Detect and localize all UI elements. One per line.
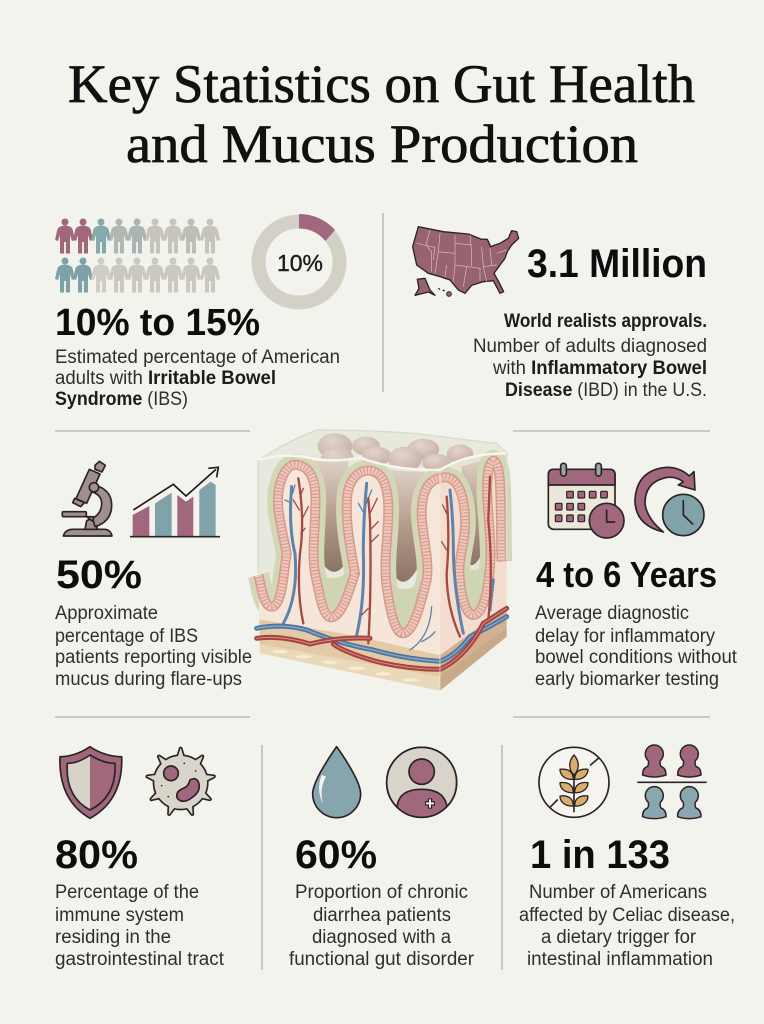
lumens — [314, 461, 350, 572]
panel: diagnostic delay — [535, 463, 738, 690]
panel: visible mucus — [55, 461, 252, 690]
description — [55, 882, 225, 970]
description — [55, 347, 340, 410]
villus interior — [258, 465, 440, 691]
description: Proportion of chronic — [295, 882, 468, 903]
statistic: 1 in 133: 1 in 133 — [530, 833, 670, 877]
description: functional gut disorder — [289, 949, 475, 970]
description: Syndrome (IBS) — [55, 389, 188, 410]
statistic: 50%: 50% — [56, 553, 142, 597]
description — [519, 882, 735, 970]
description: immune system — [55, 905, 184, 926]
panel: chronic diarrhea — [289, 747, 475, 970]
description: residing in the — [55, 927, 171, 948]
description: with Inflammatory Bowel — [492, 358, 707, 379]
green mucus layer — [258, 461, 502, 633]
icon: calendar with clock — [548, 463, 624, 538]
icon: no wheat — [539, 747, 609, 817]
description: a dietary trigger for — [541, 927, 697, 948]
donut chart: 10%: 10% — [277, 250, 323, 276]
description — [535, 603, 738, 690]
description: diarrhea patients — [313, 905, 451, 926]
front surface highlight — [258, 453, 506, 470]
description: adults with Irritable Bowel — [55, 368, 276, 389]
submucosa layers — [259, 619, 440, 691]
panel: IBS prevalence — [55, 214, 340, 410]
description — [55, 603, 252, 690]
description: percentage of IBS — [55, 626, 198, 647]
icon: people grid — [55, 218, 220, 292]
panel: celiac disease — [519, 745, 735, 970]
description: Number of Americans — [529, 882, 707, 903]
icon: people ratio — [637, 745, 707, 819]
description: Disease (IBD) in the U.S. — [505, 380, 707, 401]
description: diagnosed with a — [312, 927, 451, 948]
title: and Mucus Production — [126, 114, 638, 174]
description: bowel conditions without — [535, 647, 738, 668]
icon: immune cell — [147, 749, 214, 815]
description: delay for inflammatory — [535, 626, 715, 647]
icon: water drop — [313, 747, 361, 818]
description: Average diagnostic — [535, 603, 689, 624]
description: affected by Celiac disease, — [519, 905, 735, 926]
panel: immune system — [55, 747, 225, 970]
description: World realists approvals. — [504, 311, 707, 332]
statistic: 80%: 80% — [55, 833, 138, 877]
statistic: 4 to 6 Years: 4 to 6 Years — [536, 554, 717, 595]
statistic: 60%: 60% — [295, 833, 377, 877]
statistic: 10% to 15%: 10% to 15% — [55, 302, 260, 344]
donut chart: 10% — [258, 214, 340, 302]
front and right faces — [258, 456, 440, 691]
panel: IBD adults — [413, 227, 707, 401]
icon: circular arrow with clock — [635, 467, 704, 536]
icon: shield — [60, 747, 122, 818]
description: intestinal inflammation — [527, 949, 713, 970]
description — [289, 882, 475, 970]
title: Key Statistics on Gut Health — [68, 54, 695, 114]
description: Estimated percentage of American — [55, 347, 340, 368]
description: gastrointestinal tract — [55, 949, 225, 970]
back mucus layer — [258, 430, 507, 477]
statistic: 3.1 Million: 3.1 Million — [527, 242, 707, 286]
description: Approximate — [55, 603, 158, 624]
icon: patient — [387, 747, 457, 820]
icon: US map — [413, 227, 519, 296]
description — [473, 311, 707, 401]
title — [68, 54, 695, 174]
description: patients reporting visible — [55, 647, 252, 668]
chart: rising trend — [130, 467, 220, 537]
icon: microscope — [62, 461, 112, 536]
epithelial band — [258, 461, 502, 633]
description: mucus during flare-ups — [55, 669, 242, 690]
illustration: intestinal tissue block — [257, 430, 507, 691]
description: early biomarker testing — [535, 669, 719, 690]
description: Number of adults diagnosed — [473, 336, 707, 357]
description: Percentage of the — [55, 882, 199, 903]
blood vessels — [257, 477, 507, 669]
